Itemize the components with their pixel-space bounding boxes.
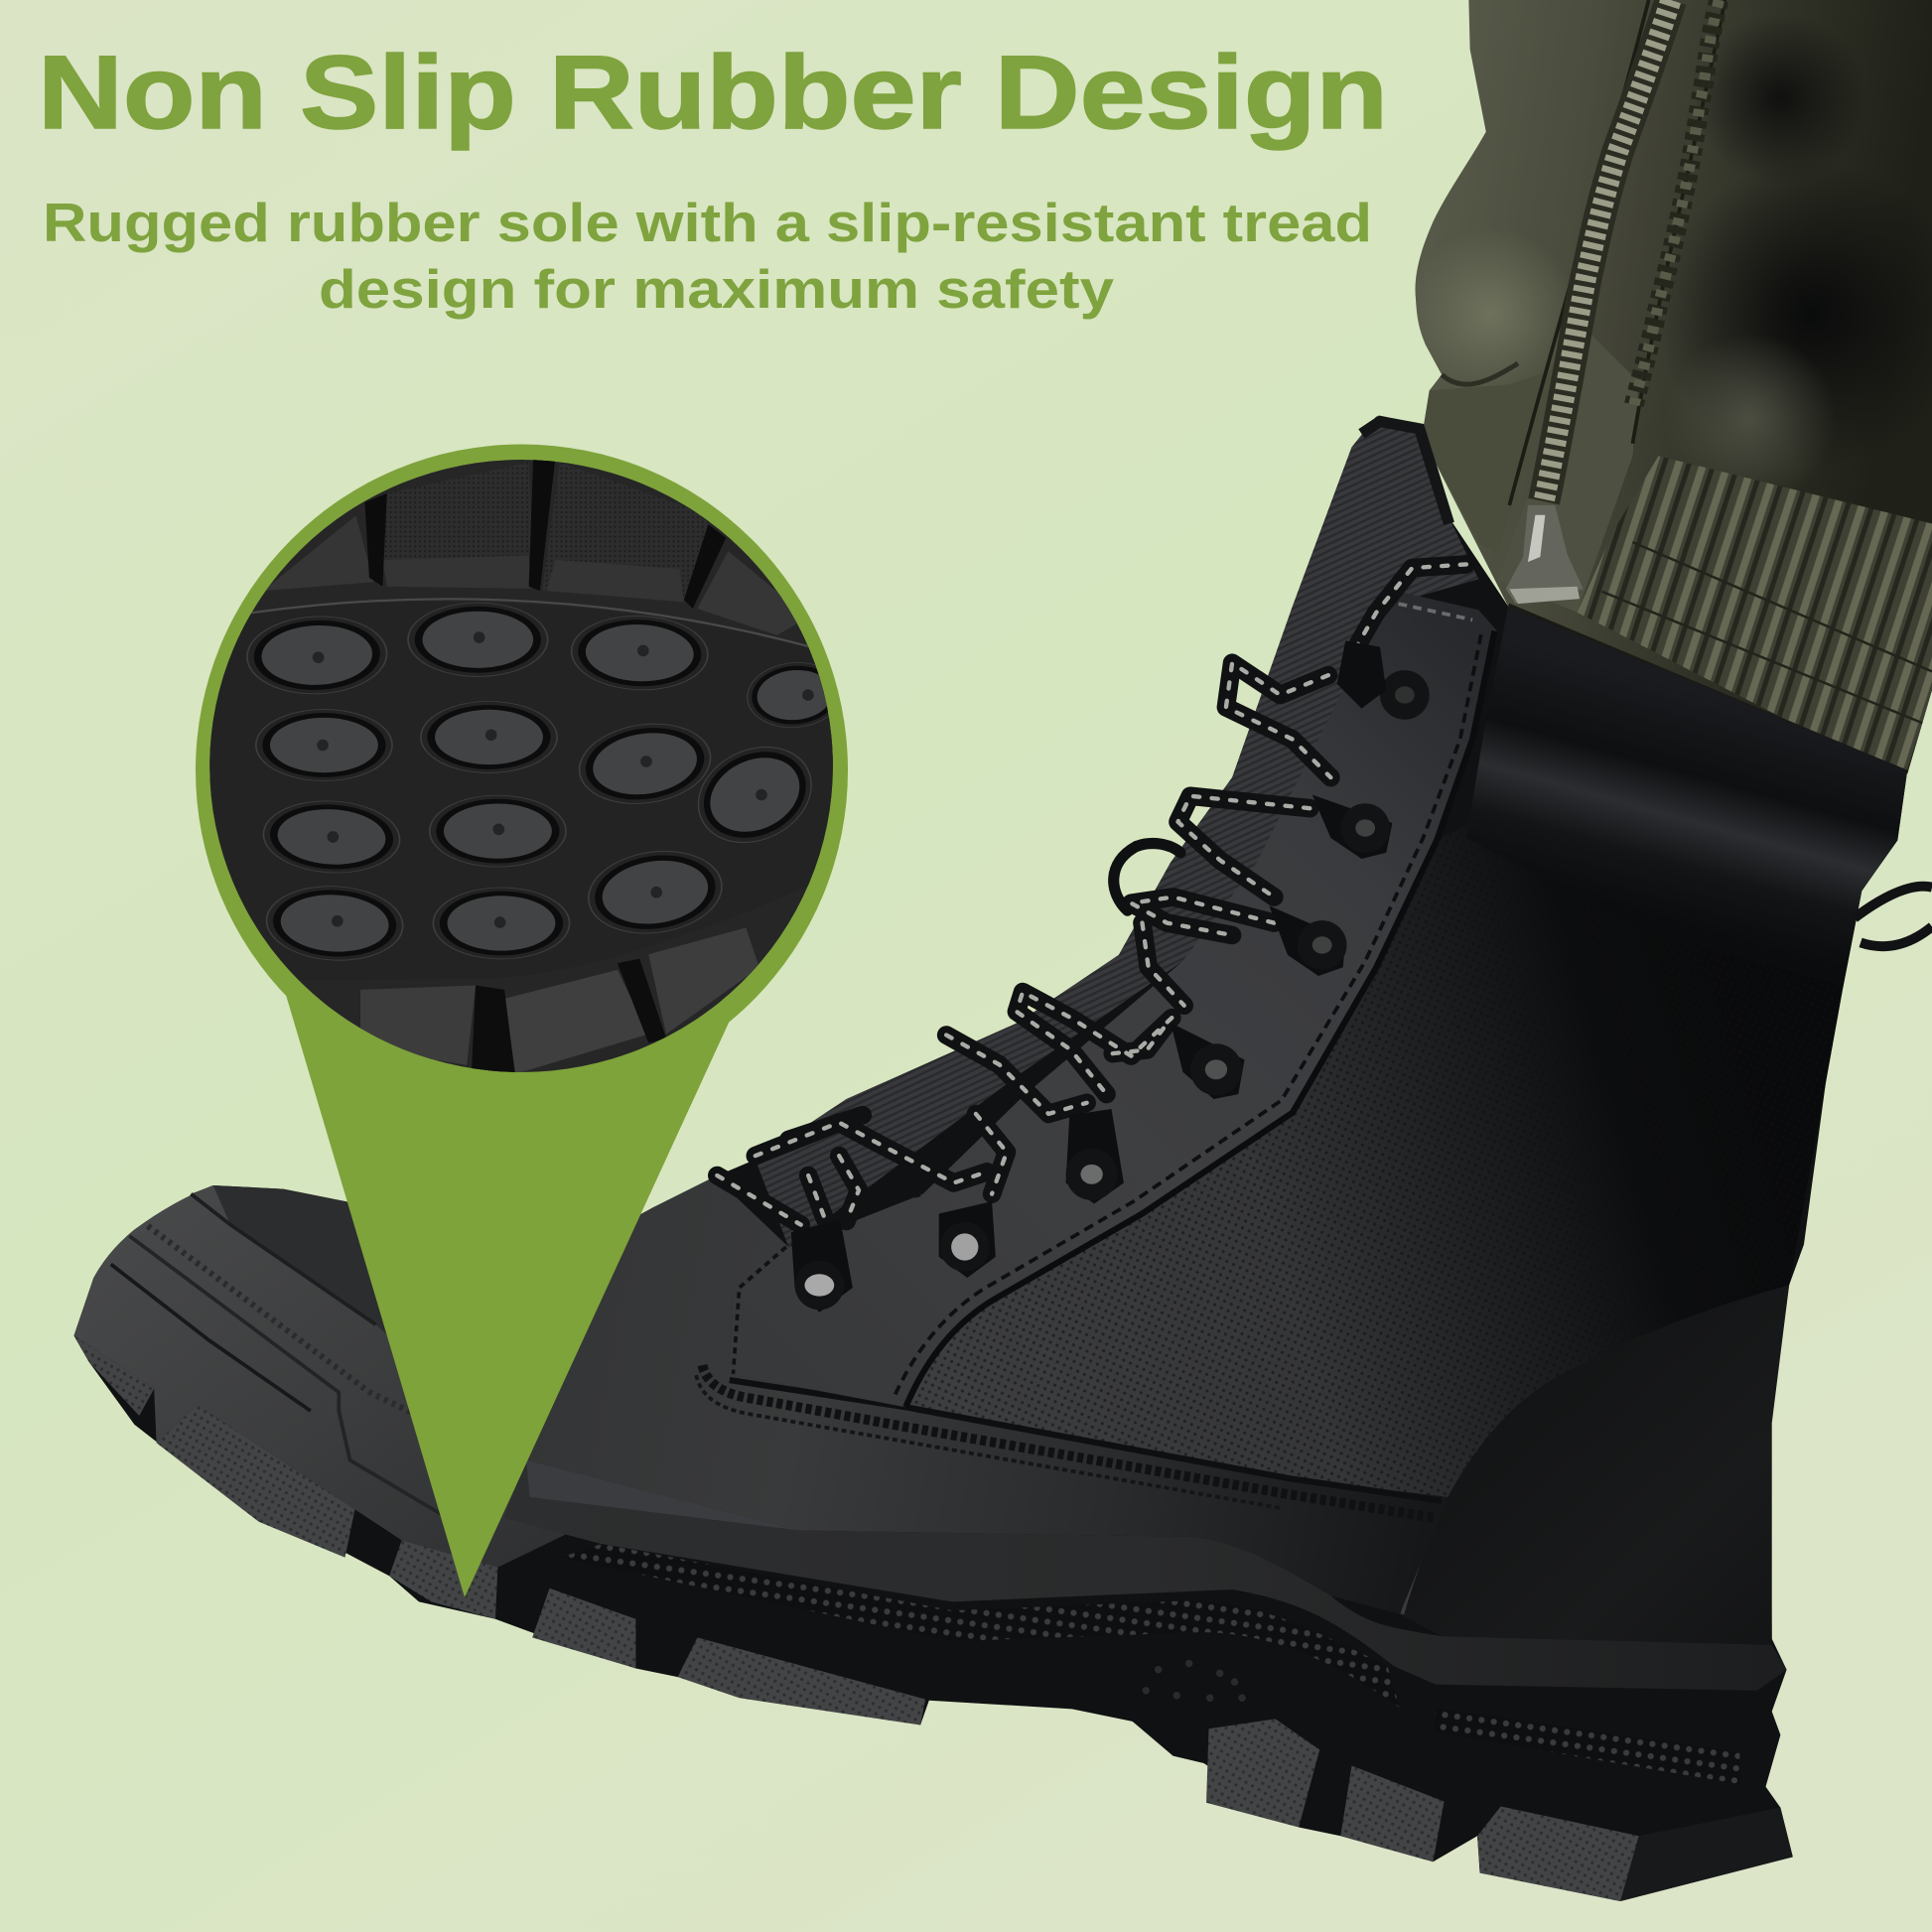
zipper [1544,0,1671,501]
padded collar [1466,607,1907,986]
tread lugs [73,1335,1793,1901]
trouser leg [1405,0,1932,788]
rubber studs [246,603,845,964]
elastic cuff [1578,456,1932,788]
subtitle line 2: design for maximum safety [319,258,1114,320]
central plate [206,602,844,981]
upper tread blocks [263,458,808,635]
seams [1509,0,1725,505]
heel counter edge [1402,1378,1552,1614]
rand grooves [111,1194,523,1516]
laces [717,564,1466,1225]
lens ring [196,445,848,1096]
pointer triangle [283,985,735,1597]
midsole band [504,1460,1787,1691]
heel stud band [1436,1708,1739,1784]
heel counter [1400,1285,1789,1645]
boot silhouette [73,416,1907,1901]
textured midsole stripe [526,1460,799,1530]
left elastic and folds [1424,380,1523,482]
lower tread blocks [360,927,759,1078]
lens: outsole close-up [201,445,845,1087]
subtitle line 1: Rugged rubber sole with a slip-resistant tread [43,192,1372,253]
callout: magnifier pointer [196,445,848,1597]
title: Non Slip Rubber Design [38,35,1388,151]
lace panel [728,592,1497,1407]
front stud band [561,1544,1400,1708]
toe rubber rand [73,1185,579,1568]
stud centre dots [313,631,814,928]
stitched vamp seam [696,1365,1442,1518]
arch perforations [1142,1660,1246,1702]
zipper pull [1506,505,1584,604]
tongue webbing [756,416,1478,1247]
eyelets [791,640,1430,1312]
mesh quarter [905,826,1844,1497]
toe cap interior [191,1185,419,1355]
pull loop [1855,887,1932,946]
toe vamp [376,1176,1448,1614]
